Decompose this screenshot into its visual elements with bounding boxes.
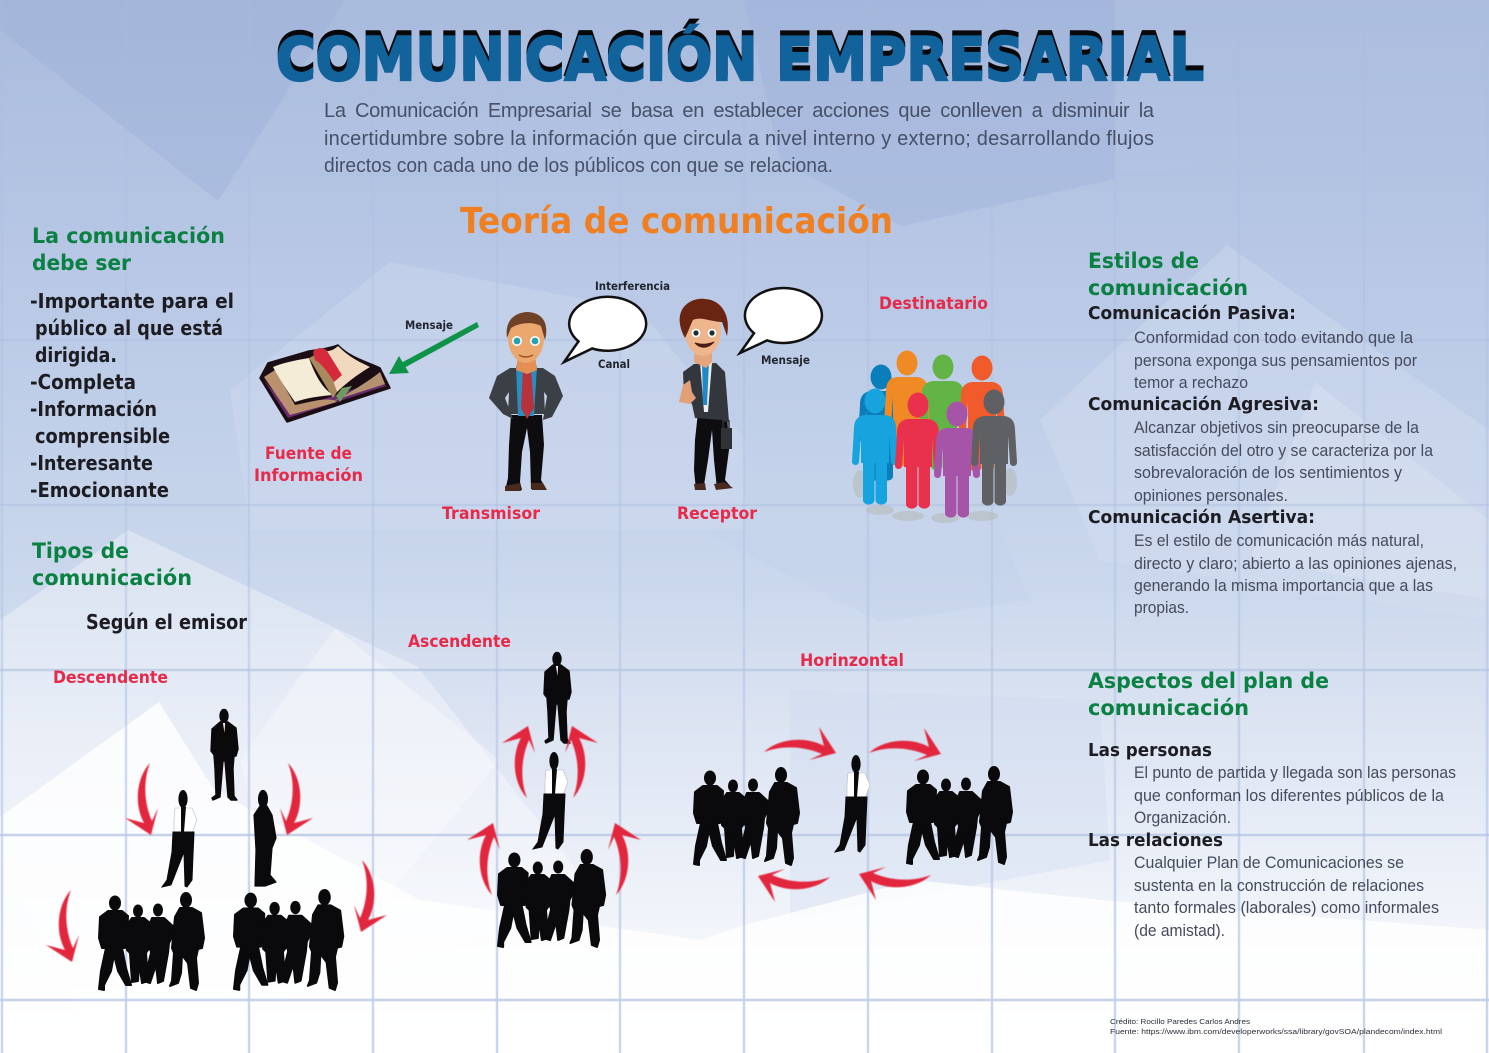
list: la comunicación debe ser: dirigida. [35, 343, 117, 367]
diagram: horizontal [694, 727, 1012, 902]
section: comunicación asertiva: generando la misma importancia que a las [1134, 577, 1433, 595]
section: las personas: El punto de partida y llegada son las personas [1134, 764, 1456, 782]
section: comunicación agresiva: Comunicación Agresiva: [1088, 395, 1319, 415]
section: las relaciones: Cualquier Plan de Comunicaciones se [1134, 854, 1404, 872]
list: la comunicación debe ser: -Información [30, 397, 157, 421]
section: comunicación pasiva [1088, 304, 1417, 392]
section: comunicación asertiva: Es el estilo de comunicación más natural, [1134, 532, 1424, 550]
list: la comunicación debe ser: público al que está [35, 316, 223, 340]
heading: aspectos del plan de comunicación: comunicación [1088, 696, 1249, 720]
section: las relaciones: (de amistad). [1134, 922, 1225, 940]
list: la comunicación debe ser: -Interesante [30, 451, 153, 475]
credits [1110, 1017, 1442, 1036]
heading: la comunicación debe ser [32, 224, 225, 275]
section: comunicación pasiva: persona exponga sus pensamientos por [1134, 352, 1417, 370]
figure: receptor [679, 299, 733, 490]
intro paragraph: incertidumbre sobre la información que circula a nivel interno y externo; desarrollando flujos [324, 128, 1154, 150]
section: comunicación asertiva: directo y claro; abierto a las opiniones ajenas, [1134, 555, 1457, 573]
intro paragraph [324, 100, 1155, 177]
title: COMUNICACIÓN EMPRESARIAL [276, 19, 1204, 90]
diagram: ascendente [467, 652, 641, 947]
speech bubble: transmisor [564, 297, 646, 362]
heading: la comunicación debe ser: debe ser [32, 251, 132, 275]
section: las relaciones [1088, 831, 1439, 940]
label: horizontal: Horinzontal [800, 651, 904, 671]
section: comunicación asertiva: propias. [1134, 599, 1189, 617]
label: fuente de información: Información [254, 466, 363, 486]
section: comunicación agresiva: opiniones personales. [1134, 487, 1288, 505]
section: comunicación agresiva: satisfacción del otro y se caracteriza por la [1134, 442, 1434, 460]
label: canal: Canal [598, 357, 630, 371]
intro paragraph: La Comunicación Empresarial se basa en establecer acciones que conlleven a disminuir la [324, 100, 1155, 122]
label: receptor: Receptor [677, 504, 758, 524]
section: las personas: Las personas [1088, 741, 1212, 761]
section: comunicación asertiva [1088, 508, 1457, 617]
list: la comunicación debe ser [30, 289, 234, 502]
list: la comunicación debe ser: -Completa [30, 370, 136, 394]
section: comunicación pasiva: Conformidad con todo evitando que la [1134, 329, 1414, 347]
section: comunicación agresiva: sobrevaloración de los sentimientos y [1134, 464, 1403, 482]
credits: Crédito: Rocillo Paredes Carlos Andres [1110, 1017, 1250, 1026]
section: comunicación agresiva: Alcanzar objetivos sin preocuparse de la [1134, 419, 1420, 437]
section: comunicación agresiva [1088, 395, 1434, 505]
heading: estilos de comunicación: comunicación [1088, 276, 1248, 300]
title: COMUNICACIÓN EMPRESARIAL [276, 24, 1204, 95]
label: mensaje: Mensaje [405, 318, 453, 332]
label: destinatario: Destinatario [879, 294, 988, 314]
section: comunicación pasiva: temor a rechazo [1134, 374, 1248, 392]
figure: transmisor [489, 312, 563, 491]
subheading: según el emisor: Según el emisor [86, 610, 247, 634]
heading: aspectos del plan de comunicación [1088, 669, 1329, 720]
heading: teoría de comunicación: Teoría de comunicación [460, 201, 893, 242]
section: las relaciones: tanto formales (laborales) como informales [1134, 899, 1439, 917]
icon: book [260, 345, 390, 422]
list: la comunicación debe ser: -Emocionante [30, 478, 169, 502]
list: la comunicación debe ser: -Importante para el [30, 289, 234, 313]
credits: Fuente: https://www.ibm.com/developerworks/ssa/library/govSOA/plandecom/index.html [1110, 1027, 1442, 1036]
label: fuente de información [254, 444, 363, 486]
heading: tipos de comunicación [32, 539, 192, 590]
section: comunicación asertiva: Comunicación Asertiva: [1088, 508, 1315, 528]
heading: aspectos del plan de comunicación: Aspectos del plan de [1088, 669, 1329, 693]
label: interferencia: Interferencia [595, 279, 670, 293]
heading: la comunicación debe ser: La comunicación [32, 224, 225, 248]
section: las relaciones: Las relaciones [1088, 831, 1223, 851]
heading: estilos de comunicación: Estilos de [1088, 249, 1199, 273]
list: la comunicación debe ser: comprensible [35, 424, 170, 448]
label: transmisor: Transmisor [442, 504, 541, 524]
intro paragraph: directos con cada uno de los públicos con que se relaciona. [324, 155, 833, 177]
label: ascendente: Ascendente [408, 632, 511, 652]
label: fuente de información: Fuente de [265, 444, 352, 464]
section: las relaciones: sustenta en la construcción de relaciones [1134, 877, 1424, 895]
diagram: descendente [46, 710, 387, 990]
icon: group of people [852, 350, 1017, 523]
section: comunicación pasiva: Comunicación Pasiva: [1088, 304, 1296, 324]
section: las personas: Organización. [1134, 809, 1231, 827]
heading: tipos de comunicación: Tipos de [32, 539, 129, 563]
heading: estilos de comunicación [1088, 249, 1248, 300]
section: las personas [1088, 741, 1456, 827]
arrow: green [389, 322, 479, 374]
heading: tipos de comunicación: comunicación [32, 566, 192, 590]
label: mensaje: Mensaje [761, 353, 810, 367]
speech bubble: receptor [740, 288, 822, 353]
label: descendente: Descendente [53, 668, 168, 688]
section: las personas: que conforman los diferentes públicos de la [1134, 787, 1445, 805]
